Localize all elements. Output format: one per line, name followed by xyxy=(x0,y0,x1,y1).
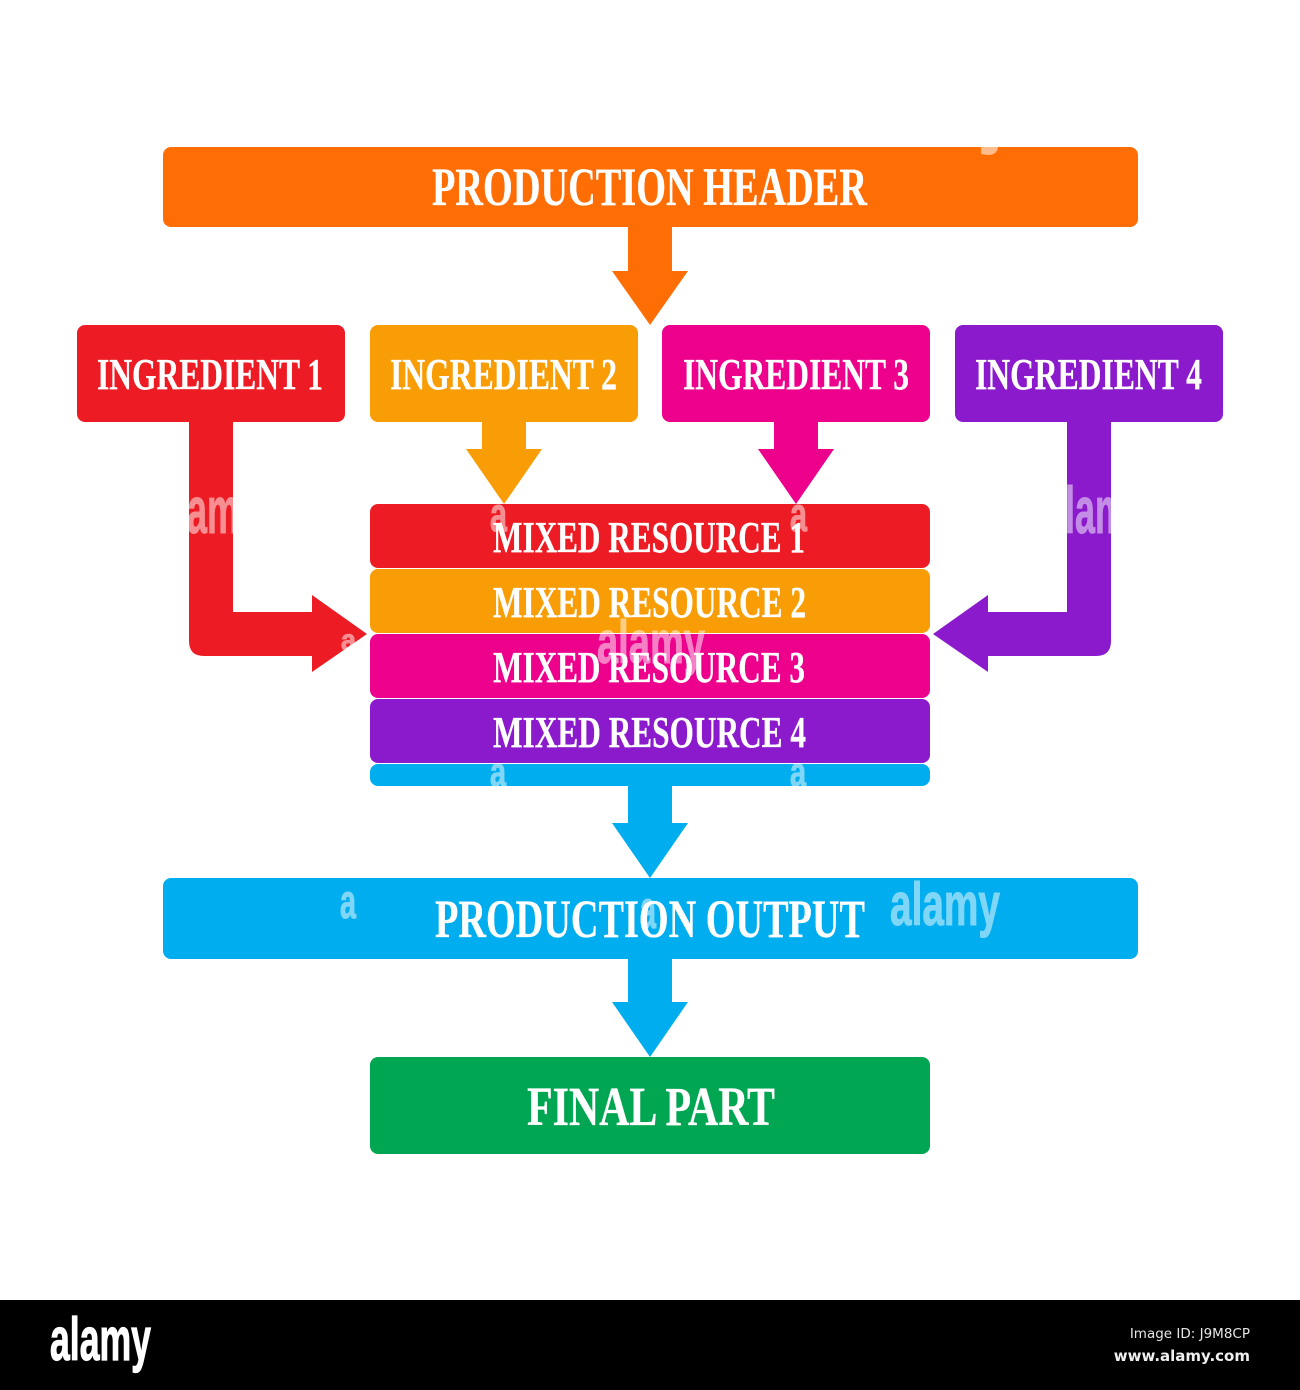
bar: mixed resource 4: MIXED RESOURCE 4 xyxy=(493,708,806,757)
footer bar: Image ID: J9M8CP xyxy=(1130,1326,1250,1342)
watermarks over the diagram xyxy=(187,147,1127,940)
watermarks over the diagram: a xyxy=(640,880,657,940)
box: ingredient 1: INGREDIENT 1 xyxy=(97,350,323,399)
watermarks over the diagram: alamy xyxy=(597,609,705,676)
footer bar: www.alamy.com xyxy=(1114,1347,1250,1365)
watermarks over the diagram: lam xyxy=(1065,473,1127,547)
arrow: header to ingredients xyxy=(612,226,688,325)
arrow: ingredient 4 to mixed resources xyxy=(933,421,1111,672)
box: final part: FINAL PART xyxy=(527,1076,775,1137)
heading: production header xyxy=(163,147,1138,227)
watermarks over the diagram: a xyxy=(790,748,806,795)
watermarks over the diagram: a xyxy=(490,748,506,795)
heading: production output: PRODUCTION OUTPUT xyxy=(435,889,865,949)
bar: mixed resource 2 xyxy=(370,569,930,633)
box: final part xyxy=(370,1057,930,1154)
box: ingredient 4: INGREDIENT 4 xyxy=(975,350,1202,399)
heading: production output xyxy=(163,878,1138,959)
arrow: ingredient 3 to mixed resources xyxy=(758,421,834,504)
bar: mixed resource 3: MIXED RESOURCE 3 xyxy=(493,643,805,692)
arrow: ingredient 1 to mixed resources xyxy=(189,421,367,672)
watermarks over the diagram: a xyxy=(340,876,356,929)
bar: mixed resource 1: MIXED RESOURCE 1 xyxy=(493,513,805,562)
watermarks over the diagram: alamy xyxy=(890,871,1000,938)
footer bar xyxy=(0,1300,1300,1390)
watermarks over the diagram: a xyxy=(490,489,507,542)
bar: mixed resource 4 xyxy=(370,699,930,763)
arrow: mixed resources to production output xyxy=(612,785,688,878)
bar: mixed resource 3 xyxy=(370,634,930,698)
box: ingredient 2 xyxy=(370,325,638,422)
box: ingredient 3: INGREDIENT 3 xyxy=(683,350,909,399)
bar: mixed resource 1 xyxy=(370,504,930,568)
box: ingredient 1 xyxy=(77,325,345,422)
box: ingredient 4 xyxy=(955,325,1223,422)
bar: mixed resource 2: MIXED RESOURCE 2 xyxy=(493,578,806,627)
arrow: ingredient 2 to mixed resources xyxy=(466,421,542,504)
arrow: production output to final part xyxy=(612,958,688,1057)
heading: production header: PRODUCTION HEADER xyxy=(432,157,868,217)
box: ingredient 3 xyxy=(662,325,930,422)
watermarks over the diagram: am xyxy=(187,473,239,547)
footer bar: alamy xyxy=(50,1306,151,1373)
watermarks over the diagram: a xyxy=(341,624,356,657)
box: ingredient 2: INGREDIENT 2 xyxy=(390,350,617,399)
bar: blue base of mixed stack xyxy=(370,764,930,786)
watermarks over the diagram: a xyxy=(790,489,807,542)
